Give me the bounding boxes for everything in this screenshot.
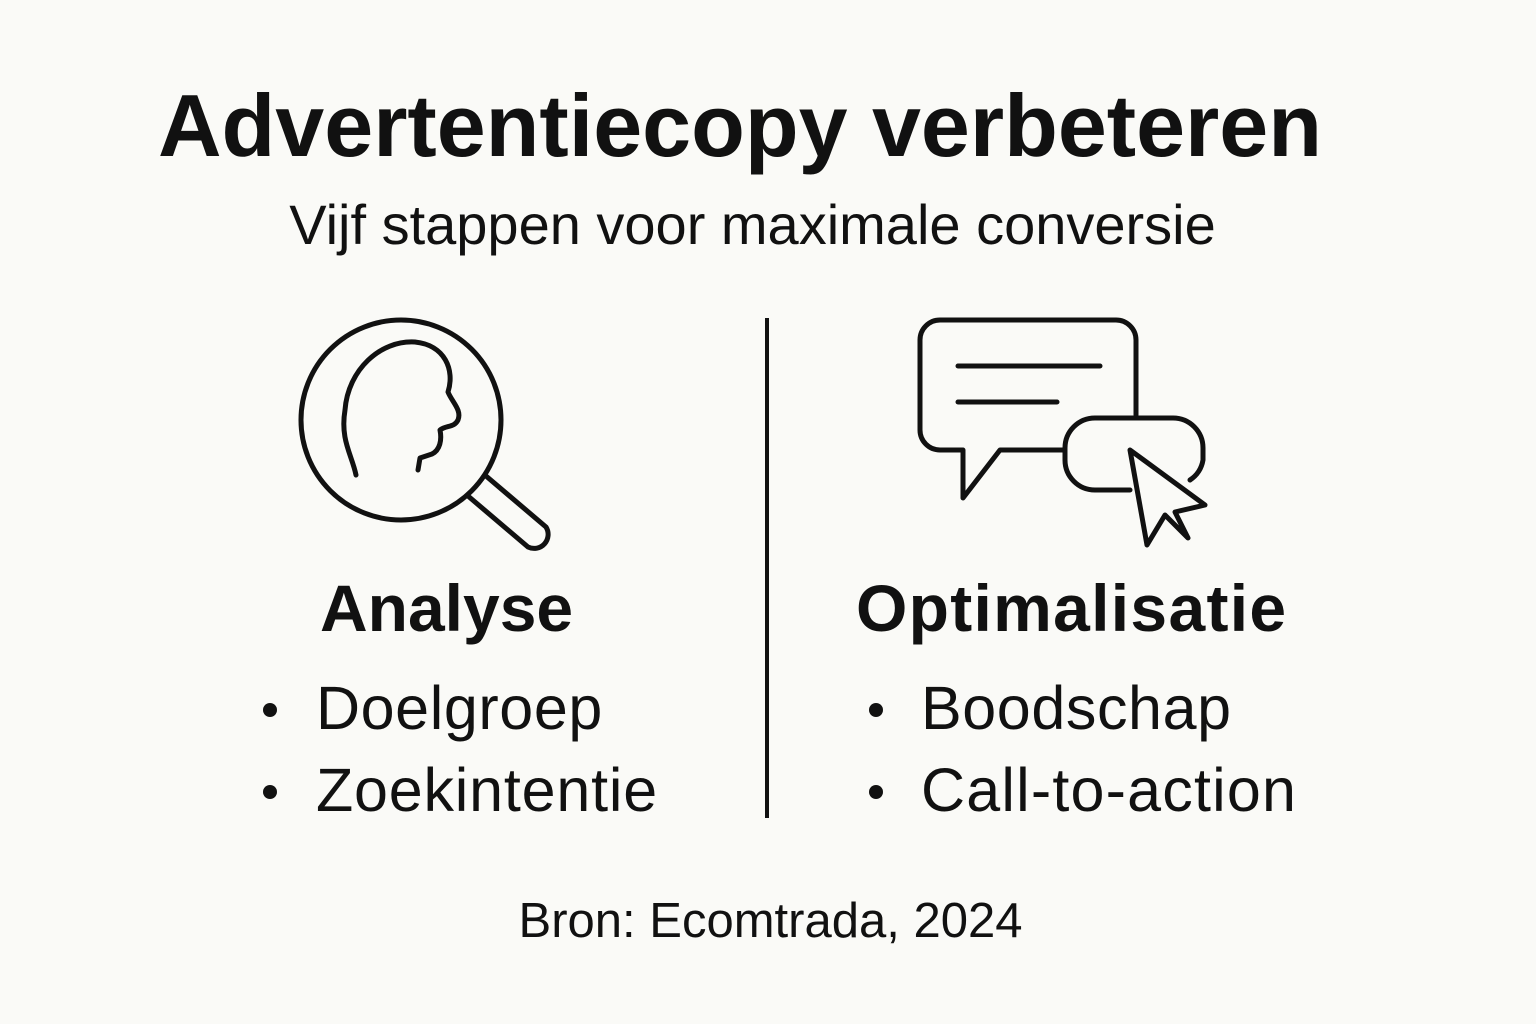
- footer source: Bron: Ecomtrada, 2024: [519, 894, 1022, 948]
- panel: Optimalisatie: [856, 571, 1297, 824]
- subtitle: Vijf stappen voor maximale conversie: [289, 193, 1216, 256]
- heading: Optimalisatie: Optimalisatie: [856, 571, 1287, 645]
- panel: Analyse: [263, 571, 658, 824]
- title: Advertentiecopy verbeteren: [158, 76, 1322, 175]
- icon: magnifier with head: [298, 318, 551, 551]
- bullet: Doelgroep: Doelgroep: [316, 674, 603, 742]
- bullet: Boodschap: Boodschap: [921, 674, 1232, 742]
- divider: [765, 318, 769, 818]
- heading: Analyse: Analyse: [320, 571, 573, 645]
- icon: chat bubble with click button: [918, 318, 1208, 548]
- bullet: Zoekintentie: Zoekintentie: [316, 756, 658, 824]
- bullet: Call-to-action: Call-to-action: [921, 756, 1297, 824]
